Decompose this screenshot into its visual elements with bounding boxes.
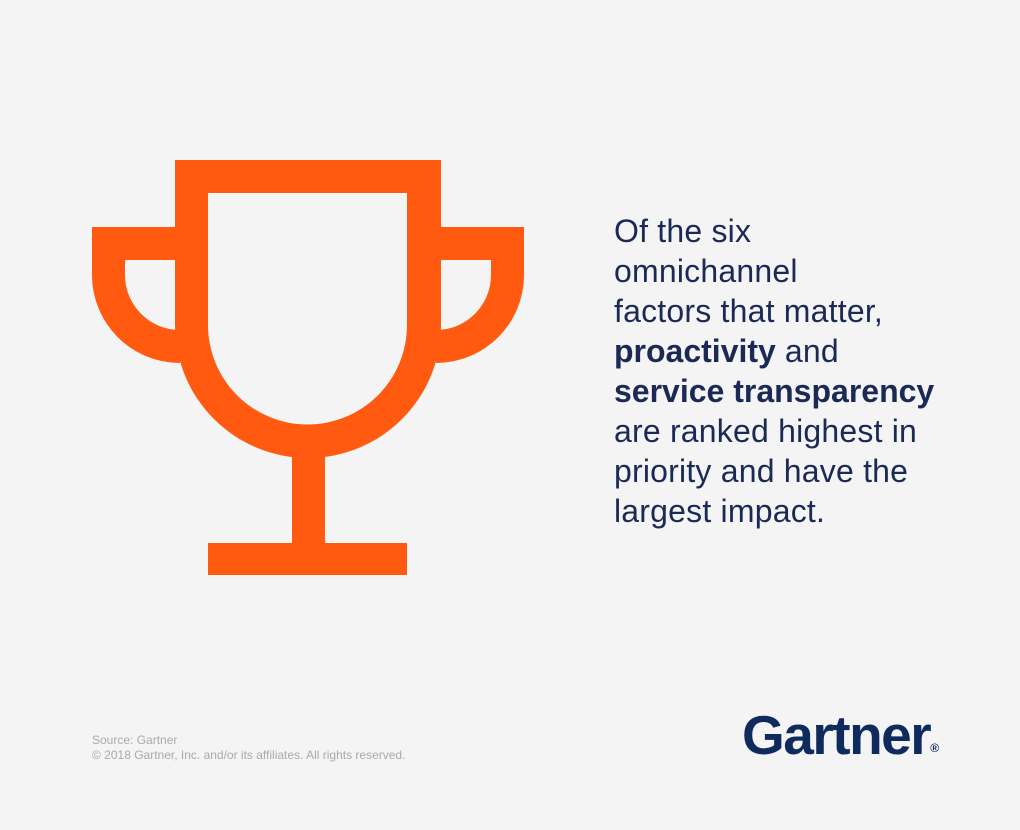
logo: Gartner: Gartner®: [742, 704, 939, 766]
text block: key message: omnichannel: [614, 253, 798, 289]
cup: [175, 160, 441, 458]
text block: key message: service transparency: [614, 373, 934, 409]
text block: key message: [614, 213, 934, 529]
stem and base: [208, 440, 407, 575]
text block: key message: factors that matter,: [614, 293, 883, 329]
footer: source: © 2018 Gartner, Inc. and/or its affiliates. All rights reserved.: [92, 748, 405, 762]
left handle: [92, 227, 180, 363]
right handle: [436, 227, 524, 363]
text block: key message: priority and have the: [614, 453, 908, 489]
text block: key message: Of the six: [614, 213, 751, 249]
text block: key message: largest impact.: [614, 493, 825, 529]
footer: source: [92, 733, 405, 762]
text block: key message: proactivity and: [614, 333, 839, 369]
text block: key message: are ranked highest in: [614, 413, 917, 449]
footer: source: Source: Gartner: [92, 733, 177, 747]
